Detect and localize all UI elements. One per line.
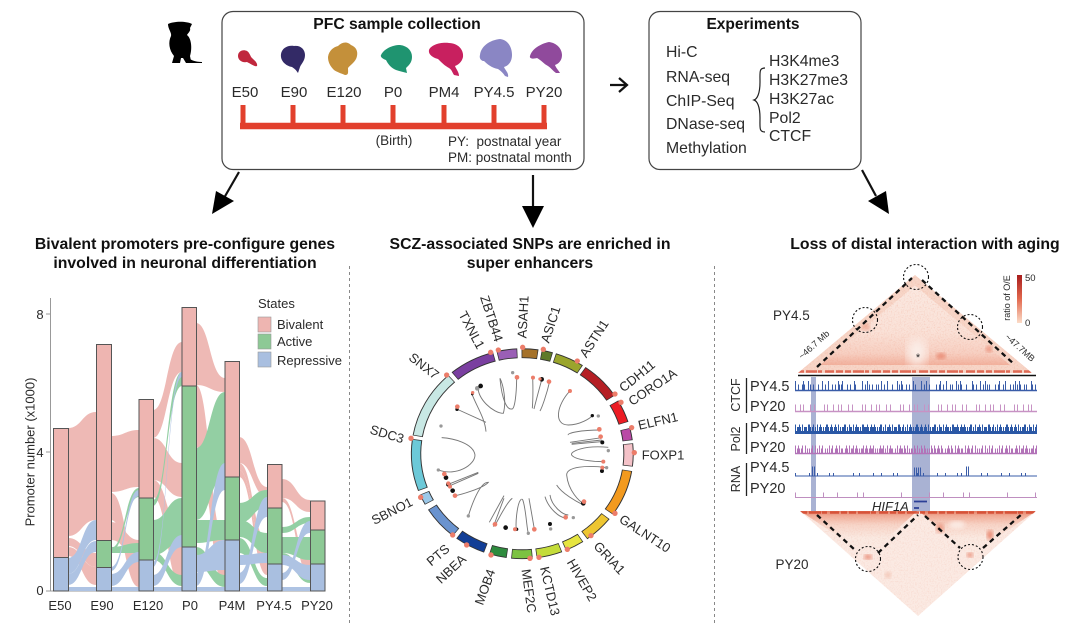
arrow: to SNP panel — [522, 175, 544, 228]
track groups: Pol2 — [729, 426, 743, 452]
icon: brain PY4.5 — [480, 39, 512, 77]
x axis labels: P4M — [219, 598, 245, 613]
gene labels: GRIA1 — [591, 539, 628, 577]
ChIP targets: H3K4me3 — [769, 53, 839, 70]
legend: Bivalent — [277, 317, 324, 332]
arrow: to Hi-C panel — [862, 170, 889, 214]
heading: PFC sample collection: PFC sample collection — [313, 16, 481, 33]
gene labels: ASTN1 — [576, 317, 612, 360]
colour bar: 0 — [1025, 318, 1030, 329]
legend: States — [258, 296, 295, 311]
assay list: Methylation — [666, 140, 747, 157]
x axis labels: PY20 — [301, 598, 333, 613]
ChIP targets: H3K27me3 — [769, 72, 848, 89]
gene labels: NBEA — [433, 551, 469, 587]
ChIP targets: CTCF — [769, 128, 811, 145]
timeline notes: PY: postnatal year — [448, 134, 562, 149]
gene labels: SBNO1 — [369, 494, 415, 528]
x axis labels: PY4.5 — [256, 598, 292, 613]
gene model: HIF1A: HIF1A — [872, 499, 909, 514]
coordinates: ~46.7 Mb — [797, 328, 831, 361]
highlight columns — [811, 377, 930, 511]
timeline — [240, 105, 547, 126]
heading: SCZ SNPs: super enhancers — [467, 255, 593, 272]
icon: brain E90 — [281, 46, 305, 73]
track groups: CTCF — [729, 378, 743, 412]
inner dots — [437, 371, 610, 535]
brace — [754, 68, 765, 132]
assay list — [666, 44, 747, 157]
arrow: to bivalent panel — [212, 172, 239, 214]
track labels: PY20 — [750, 399, 785, 415]
track labels: PY20 — [750, 440, 785, 456]
inner links — [438, 377, 608, 533]
track groups: RNA — [729, 465, 743, 492]
icon: macaque silhouette — [168, 22, 202, 63]
arrow: to experiments — [610, 78, 627, 92]
gene labels: CDH11 — [616, 357, 658, 395]
heading: Experiments: Experiments — [706, 16, 800, 33]
track labels — [750, 379, 790, 497]
axes — [22, 298, 325, 598]
ChIP targets — [769, 53, 848, 145]
gene labels — [368, 294, 684, 617]
gene labels: PTS — [423, 541, 453, 569]
track RNA PY20 — [795, 495, 1037, 498]
icon: brain PY20 — [530, 42, 562, 73]
panel: Experiments — [649, 12, 861, 170]
timeline notes — [376, 133, 572, 165]
colour bar: ratio of O/E — [1002, 275, 1012, 321]
stage labels: E90 — [281, 84, 307, 101]
stage labels: P0 — [384, 84, 402, 101]
legend: Repressive — [277, 353, 342, 368]
heading: bivalent promoters: involved in neuronal differentiation — [53, 255, 317, 272]
gene labels: ZBTB44 — [477, 294, 506, 343]
dashed boundaries PY4.5 — [817, 278, 1015, 367]
gene labels: ASAH1 — [514, 295, 532, 339]
icon: brain P0 — [381, 45, 412, 73]
label PY20: PY20 — [776, 557, 809, 572]
dashed boundaries PY20 — [817, 514, 1022, 553]
assay list: DNase-seq — [666, 116, 745, 133]
label PY4.5: PY4.5 — [773, 308, 810, 323]
assay list: RNA-seq — [666, 69, 730, 86]
heatmap: PY4.5 — [798, 275, 1032, 373]
ring segments — [373, 312, 672, 595]
track RNA PY4.5 — [795, 471, 1037, 476]
gene labels: GALNT10 — [617, 511, 673, 556]
assay list: Hi-C — [666, 44, 698, 61]
colour bar — [1002, 273, 1036, 329]
x axis labels: E120 — [133, 598, 163, 613]
axes: 4 — [36, 445, 44, 460]
stacked bars — [54, 308, 325, 591]
gene model: HIF1A — [872, 499, 927, 514]
track labels: PY20 — [750, 481, 785, 497]
track CTCF PY20 — [795, 408, 1037, 412]
panel: PFC sample collection — [222, 12, 584, 170]
gene labels: SNX7 — [406, 350, 442, 382]
track Pol2 PY20 — [795, 450, 1037, 454]
stage labels: PY20 — [526, 84, 562, 101]
track Pol2 PY4.5 — [795, 428, 1037, 432]
heading: bivalent promoters — [35, 236, 335, 272]
chart: Hi-C and tracks — [729, 264, 1037, 616]
track CTCF PY4.5 — [795, 386, 1037, 390]
x axis labels: E50 — [48, 598, 72, 613]
dashed loop circles PY20 — [856, 544, 983, 572]
axes: 8 — [36, 307, 44, 322]
gene labels: FOXP1 — [642, 448, 684, 462]
icon: brain E120 — [328, 42, 357, 75]
alluvial flows: repressive — [68, 372, 310, 591]
stage labels: PY4.5 — [474, 84, 514, 101]
gene labels: MEF2C — [519, 568, 539, 614]
colour bar: 50 — [1025, 273, 1036, 284]
x axis labels: E90 — [90, 598, 114, 613]
gene labels: CORO1A — [626, 365, 680, 409]
gene labels: ELFN1 — [637, 409, 679, 433]
legend: Active — [277, 334, 312, 349]
stage labels: E50 — [232, 84, 258, 101]
alluvial flows: active — [111, 372, 310, 587]
x axis labels: P0 — [182, 598, 198, 613]
axes: 0 — [36, 583, 44, 598]
heading: Loss of distal interaction: Loss of distal interaction with aging — [790, 236, 1060, 253]
gene labels: KCTD13 — [537, 565, 563, 617]
star: * — [916, 352, 921, 364]
timeline notes: PM: postnatal month — [448, 150, 572, 165]
gene labels: MOB4 — [472, 567, 498, 607]
dashed loop circles PY4.5 — [852, 264, 982, 340]
heading: SCZ SNPs: SCZ-associated SNPs are enriched in — [390, 236, 670, 253]
chart: circos of SCZ genes — [368, 294, 684, 617]
chart: alluvial promoter states — [22, 296, 342, 613]
outer gene dots — [408, 345, 637, 561]
axes: Promoter number (x1000) — [22, 378, 38, 526]
track labels: PY4.5 — [750, 379, 790, 395]
track labels: PY4.5 — [750, 420, 790, 436]
stage labels — [232, 84, 562, 101]
assay list: ChIP-Seq — [666, 93, 734, 110]
icon: brain E50 — [238, 50, 257, 66]
gene labels: ASIC1 — [538, 304, 563, 345]
x axis labels — [48, 598, 333, 613]
ChIP targets: Pol2 — [769, 110, 801, 127]
coordinates: ~47.7MB — [1003, 332, 1037, 364]
legend — [258, 296, 342, 368]
stage labels: PM4 — [429, 84, 459, 101]
track labels: PY4.5 — [750, 460, 790, 476]
heading: bivalent promoters: Bivalent promoters pre-configure genes — [35, 236, 335, 253]
timeline notes: (Birth) — [376, 133, 412, 148]
heatmap: PY20 — [800, 511, 1036, 616]
ChIP targets: H3K27ac — [769, 91, 834, 108]
track groups — [729, 378, 746, 496]
coordinates — [797, 328, 1037, 364]
heading: SCZ SNPs — [390, 236, 670, 272]
gene labels: SDC3 — [368, 422, 406, 446]
stage labels: E120 — [326, 84, 362, 101]
gene labels: HIVEP2 — [564, 556, 600, 604]
gene labels: TXNL1 — [456, 309, 488, 351]
icon: brain PM4 — [429, 43, 463, 76]
alluvial flows: bivalent — [68, 323, 310, 587]
